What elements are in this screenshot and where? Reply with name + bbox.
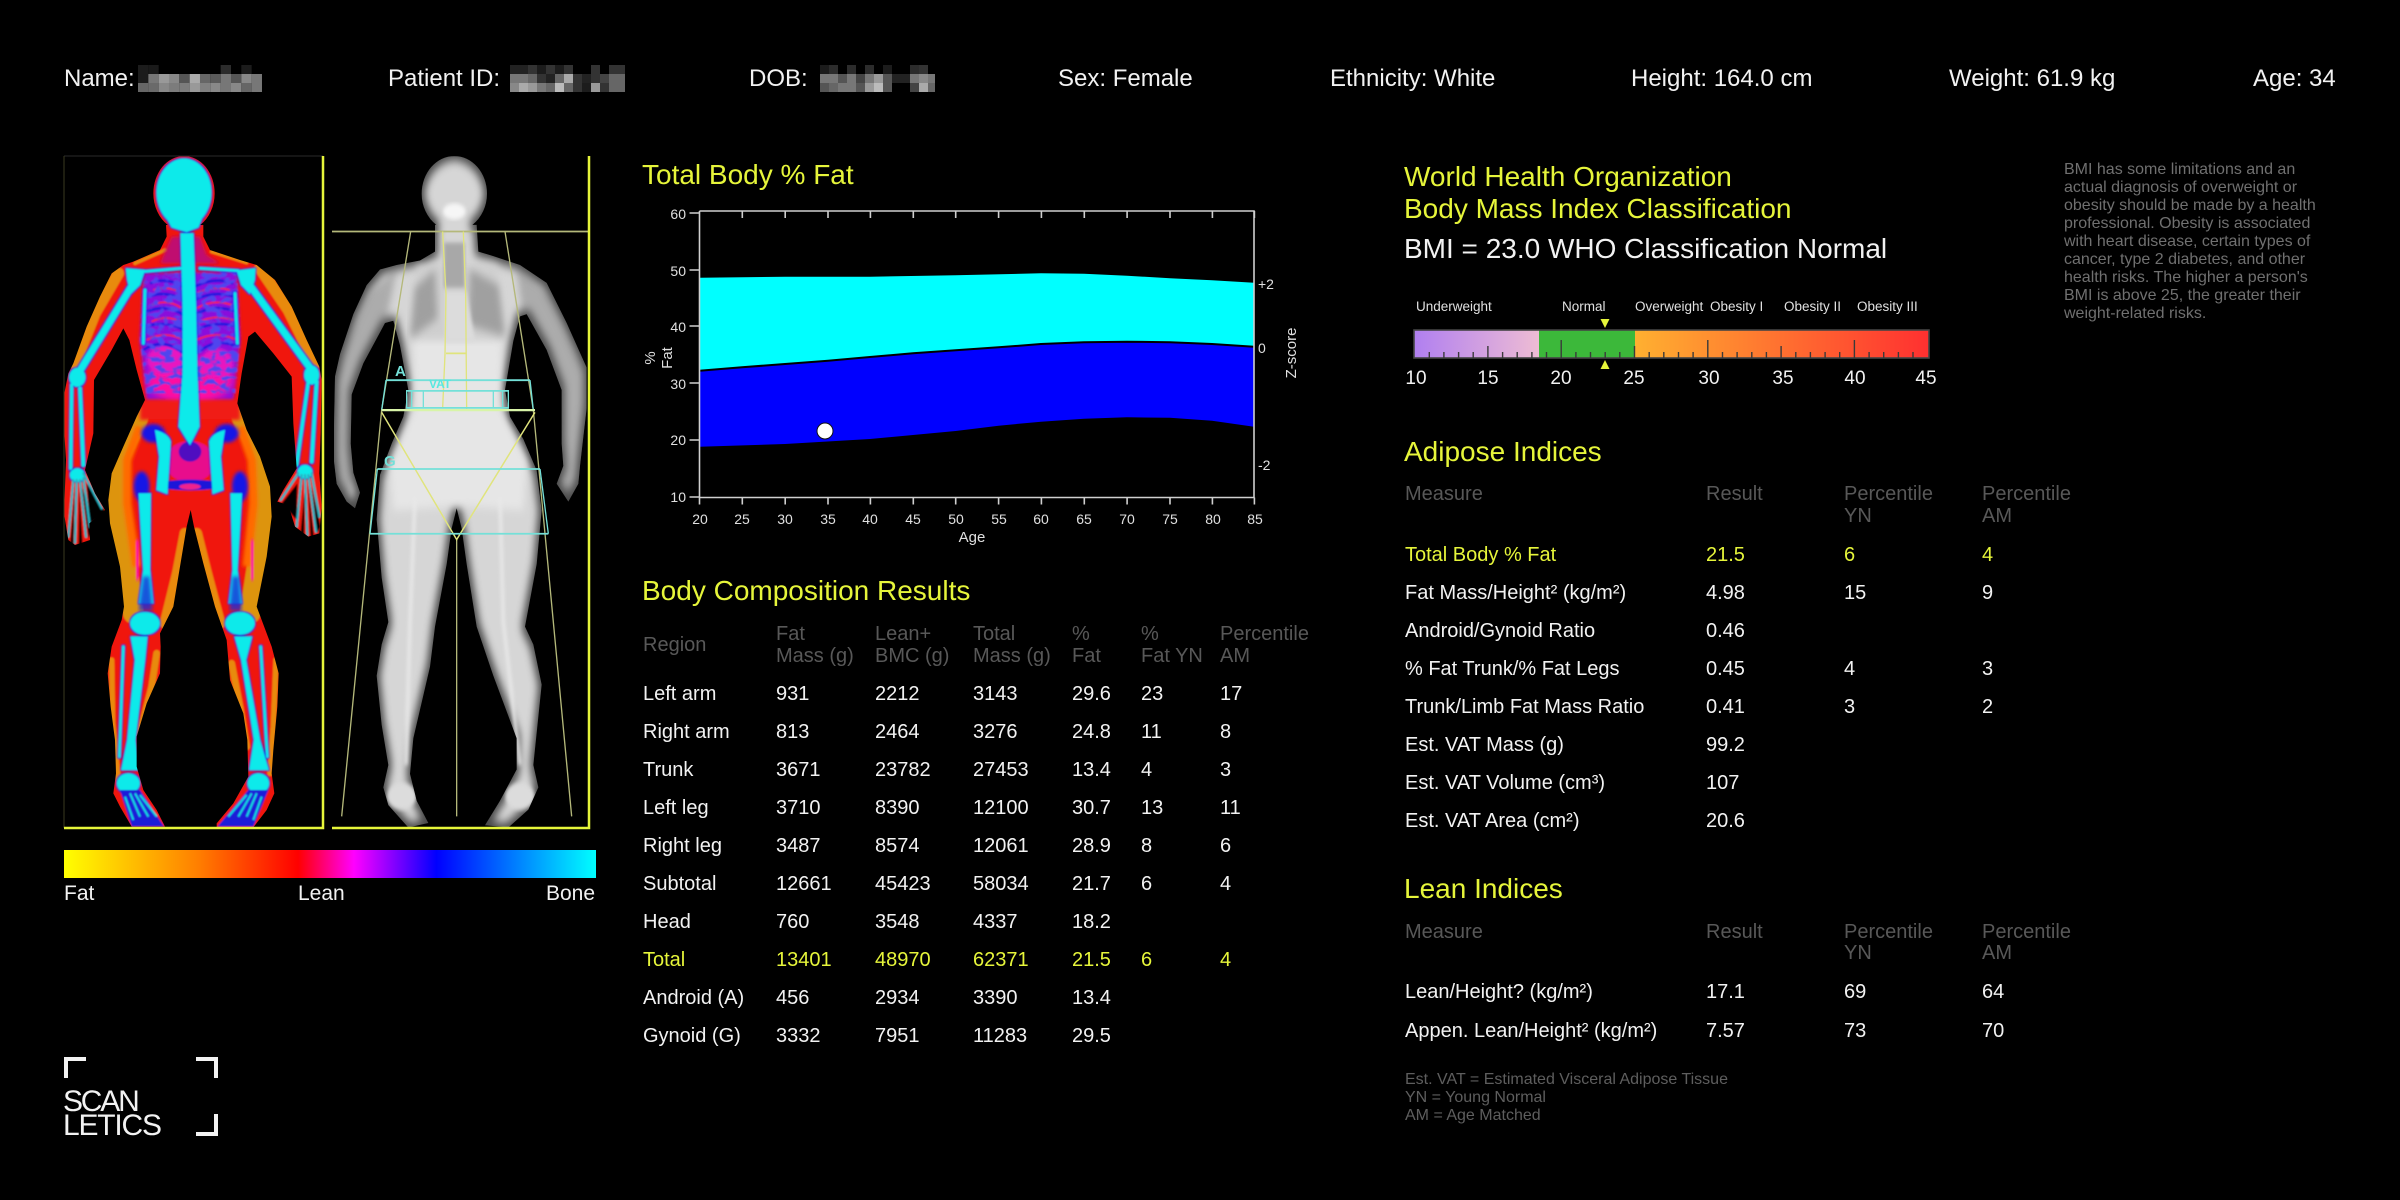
row: trunk/legs: 3 (1982, 658, 1993, 680)
y axis title (642, 346, 676, 369)
footnote: Est. VAT = Estimated Visceral Adipose Tissue (1405, 1071, 1728, 1088)
row: left leg: 8390 (875, 797, 920, 819)
row: trunk/legs: 4 (1844, 658, 1855, 680)
row: left leg: 12100 (973, 797, 1029, 819)
row: right arm: 3276 (973, 721, 1018, 743)
row: subtotal: 6 (1141, 873, 1152, 895)
category labels: Overweight (1635, 299, 1704, 314)
heading: total body % fat: Total Body % Fat (642, 159, 854, 190)
x axis labels: 55 (991, 511, 1007, 527)
scale numbers: 20 (1550, 368, 1572, 389)
row: subtotal: 12661 (776, 873, 832, 895)
table header: % (1072, 623, 1090, 645)
row: android: 456 (776, 987, 809, 1009)
row: right leg: 28.9 (1072, 835, 1111, 857)
heading: WHO body mass index classification (1404, 161, 1792, 224)
x axis labels: 30 (777, 511, 793, 527)
row: fat mass index: 9 (1982, 582, 1993, 604)
row: total: 6 (1141, 949, 1152, 971)
row: right leg: Right leg (643, 835, 722, 857)
x axis labels: 65 (1076, 511, 1092, 527)
table header: Result (1706, 483, 1763, 505)
row: right leg: 8574 (875, 835, 920, 857)
table header: Mass (g) (776, 645, 854, 667)
x axis labels: 60 (1033, 511, 1049, 527)
row: fat mass index (1405, 582, 1993, 604)
category labels: Obesity I (1710, 299, 1763, 314)
explanatory note: BMI has some limitations and an (2064, 161, 2295, 178)
patient id: Patient ID: (388, 65, 500, 92)
row: VAT volume: 107 (1706, 772, 1739, 794)
marker bottom (1600, 360, 1610, 369)
colour scale legend: Fat (64, 882, 95, 905)
row: fat mass index: Fat Mass/Height² (kg/m²) (1405, 582, 1626, 604)
row: left leg: 3710 (776, 797, 820, 819)
row: left arm: 17 (1220, 683, 1242, 705)
row: right arm: 24.8 (1072, 721, 1111, 743)
row: android: 13.4 (1072, 987, 1111, 1009)
row: right arm: 813 (776, 721, 809, 743)
row: android/gynoid: Android/Gynoid Ratio (1405, 620, 1595, 642)
row: head (643, 911, 1111, 933)
scale numbers: 25 (1623, 368, 1645, 389)
row: left arm: 23 (1141, 683, 1163, 705)
table header: Measure (1405, 483, 1483, 505)
row: left arm: 29.6 (1072, 683, 1111, 705)
row: right leg: 8 (1141, 835, 1152, 857)
logo: Scanletics: SCAN (63, 1085, 138, 1118)
row: total: 48970 (875, 949, 931, 971)
median line (700, 342, 1254, 371)
x axis labels: 50 (948, 511, 964, 527)
feet (120, 790, 164, 827)
row: total body percent fat: 6 (1844, 544, 1855, 566)
patient name (64, 65, 262, 92)
soft tissue (334, 156, 587, 828)
table header: Measure (1405, 921, 1483, 943)
row: head: 4337 (973, 911, 1018, 933)
row: subtotal: Subtotal (643, 873, 716, 895)
row: total body percent fat: 21.5 (1706, 544, 1745, 566)
heading: lean indices: Lean Indices (1404, 873, 1563, 904)
table header: Fat (776, 623, 805, 645)
row: VAT area (1405, 810, 1745, 832)
row: lean/height: Lean/Height? (kg/m²) (1405, 981, 1593, 1003)
row: trunk/limb (1405, 696, 1993, 718)
row: left leg (643, 797, 1241, 819)
x axis labels: 35 (820, 511, 836, 527)
logo: Scanletics: LETICS (63, 1109, 161, 1142)
table header (1405, 483, 2071, 527)
x axis labels: 85 (1247, 511, 1263, 527)
table header: Percentile (1220, 623, 1309, 645)
row: total: 21.5 (1072, 949, 1111, 971)
abdomen and pelvis (390, 339, 527, 511)
patient name: Name: (64, 65, 135, 92)
x axis labels: 20 (692, 511, 708, 527)
row: android: 2934 (875, 987, 920, 1009)
y axis title: % (642, 351, 659, 365)
date of birth (749, 65, 935, 92)
table header: AM (1220, 645, 1250, 667)
table header: Percentile (1982, 921, 2071, 943)
scale numbers: 35 (1772, 368, 1794, 389)
row: appendicular lean/height: 73 (1844, 1020, 1866, 1042)
heading: WHO body mass index classification: World Health Organization (1404, 161, 1732, 192)
panel: colour composition body scan (64, 156, 324, 830)
x axis labels: 75 (1162, 511, 1178, 527)
row: right arm: 8 (1220, 721, 1231, 743)
row: subtotal (643, 873, 1231, 895)
scale bar (1414, 330, 1929, 358)
row: gynoid: Gynoid (G) (643, 1025, 741, 1047)
row: left arm: Left arm (643, 683, 716, 705)
ribs (143, 281, 237, 353)
patient id (388, 65, 625, 92)
row: right arm: 2464 (875, 721, 920, 743)
colour scale legend (64, 850, 596, 905)
row: trunk: 13.4 (1072, 759, 1111, 781)
row: left arm: 931 (776, 683, 809, 705)
row: VAT mass (1405, 734, 1745, 756)
chart: total body percent fat by age (642, 206, 1300, 546)
panel frame (64, 155, 323, 157)
heading: body composition results: Body Composition Results (642, 575, 970, 606)
row: subtotal: 45423 (875, 873, 931, 895)
row: gynoid: 11283 (973, 1025, 1027, 1047)
category labels (1416, 299, 1918, 314)
row: VAT volume (1405, 772, 1739, 794)
pelvis blue flanks (141, 424, 165, 443)
row: trunk: 3671 (776, 759, 820, 781)
row: VAT area: Est. VAT Area (cm²) (1405, 810, 1579, 832)
neck shading (160, 237, 220, 263)
chart: total body percent fat by age: -2 (1258, 457, 1271, 473)
table header: AM (1982, 942, 2012, 964)
z-score labels: +2 (1258, 276, 1274, 292)
x axis labels: 25 (734, 511, 750, 527)
row: trunk: 23782 (875, 759, 931, 781)
row: android (643, 987, 1111, 1009)
region label VAT: VAT (429, 377, 452, 391)
row: right leg: 12061 (973, 835, 1029, 857)
femur distal shading (139, 577, 153, 611)
table: adipose indices (1405, 483, 2071, 832)
marker top (1600, 319, 1610, 328)
lower band (700, 342, 1254, 447)
mottled tissue (140, 272, 240, 393)
row: trunk: Trunk (643, 759, 694, 781)
explanatory note: obesity should be made by a health (2064, 197, 2316, 214)
table header (643, 623, 1309, 667)
row: lean/height: 64 (1982, 981, 2004, 1003)
row: left leg: 30.7 (1072, 797, 1111, 819)
table: lean indices (1405, 921, 2071, 1042)
scale numbers (1405, 368, 1937, 389)
scale numbers: 45 (1915, 368, 1937, 389)
row: trunk/limb: 3 (1844, 696, 1855, 718)
heading: adipose indices: Adipose Indices (1404, 436, 1602, 467)
y axis title: Fat (659, 346, 676, 369)
x axis labels: 70 (1119, 511, 1135, 527)
row: gynoid (643, 1025, 1111, 1047)
footnote (1405, 1071, 1728, 1124)
hand gaps (70, 483, 321, 547)
table header: % (1141, 623, 1159, 645)
row: total body percent fat: Total Body % Fat (1405, 544, 1557, 566)
row: left leg: Left leg (643, 797, 709, 819)
row: VAT mass: 99.2 (1706, 734, 1745, 756)
y axis labels: 10 (670, 489, 686, 505)
row: right arm: 11 (1141, 721, 1162, 743)
row: trunk: 27453 (973, 759, 1029, 781)
row: android/gynoid (1405, 620, 1745, 642)
table header (1405, 921, 2071, 964)
ethnicity: Ethnicity: White (1330, 65, 1495, 92)
row: fat mass index: 15 (1844, 582, 1866, 604)
scale numbers: 30 (1698, 368, 1720, 389)
BMI result: BMI = 23.0 WHO Classification Normal (1404, 233, 1887, 264)
row: appendicular lean/height (1405, 1020, 2004, 1042)
row: trunk/legs (1405, 658, 1993, 680)
scale numbers: 40 (1844, 368, 1866, 389)
row: android/gynoid: 0.46 (1706, 620, 1745, 642)
row: trunk: 3 (1220, 759, 1231, 781)
row: fat mass index: 4.98 (1706, 582, 1745, 604)
table header: Fat (1072, 645, 1101, 667)
row: trunk/limb: Trunk/Limb Fat Mass Ratio (1405, 696, 1644, 718)
explanatory note: weight-related risks. (2063, 305, 2206, 322)
row: android: 3390 (973, 987, 1018, 1009)
z-score axis title: Z-score (1283, 328, 1300, 378)
category labels: Underweight (1416, 299, 1492, 314)
height: Height: 164.0 cm (1631, 65, 1812, 92)
row: head: 760 (776, 911, 809, 933)
explanatory note: professional. Obesity is associated (2064, 215, 2310, 232)
arm shading (330, 269, 397, 497)
skeleton (69, 159, 319, 793)
hands (68, 473, 319, 543)
logo: Scanletics (63, 1059, 216, 1142)
chart: total body percent fat by age: 0 (1258, 340, 1266, 356)
row: gynoid: 3332 (776, 1025, 820, 1047)
footnote: YN = Young Normal (1405, 1089, 1546, 1106)
patient header (64, 65, 2336, 92)
row: appendicular lean/height: 70 (1982, 1020, 2004, 1042)
y axis labels (670, 206, 686, 505)
upper band (700, 273, 1254, 371)
sex: Sex: Female (1058, 65, 1193, 92)
row: subtotal: 4 (1220, 873, 1231, 895)
footnote: AM = Age Matched (1405, 1107, 1541, 1124)
table header: AM (1982, 505, 2012, 527)
row: total body percent fat: 4 (1982, 544, 1993, 566)
table header: Percentile (1844, 921, 1933, 943)
region label G: G (384, 453, 396, 470)
spine and mediastinum (444, 243, 465, 287)
row: total: 62371 (973, 949, 1029, 971)
table: body composition results (643, 623, 1309, 1047)
category labels: Obesity III (1857, 299, 1918, 314)
table header: YN (1844, 942, 1872, 964)
y axis labels: 60 (670, 206, 686, 222)
long bones (406, 497, 520, 765)
x axis labels: 45 (905, 511, 921, 527)
android and gynoid regions (370, 380, 548, 534)
row: trunk (643, 759, 1231, 781)
panel frame (332, 156, 589, 828)
explanatory note: actual diagnosis of overweight or (2064, 179, 2298, 196)
scale numbers: 15 (1477, 368, 1499, 389)
x axis labels (692, 511, 1263, 527)
age: Age: 34 (2253, 65, 2336, 92)
row: head: 3548 (875, 911, 920, 933)
row: trunk: 4 (1141, 759, 1152, 781)
axes and ticks (690, 211, 1254, 504)
row: total: 4 (1220, 949, 1231, 971)
row: right leg (643, 835, 1231, 857)
row: lean/height: 17.1 (1706, 981, 1745, 1003)
explanatory note: with heart disease, certain types of (2063, 233, 2311, 250)
row: left leg: 13 (1141, 797, 1163, 819)
table header: Percentile (1844, 483, 1933, 505)
row: gynoid: 29.5 (1072, 1025, 1111, 1047)
table header: Result (1706, 921, 1763, 943)
x axis labels: 80 (1205, 511, 1221, 527)
row: left arm (643, 683, 1242, 705)
row: head: 18.2 (1072, 911, 1111, 933)
scale numbers: 10 (1405, 368, 1427, 389)
row: trunk/legs: % Fat Trunk/% Fat Legs (1405, 658, 1620, 680)
row: total: 13401 (776, 949, 832, 971)
row: trunk/legs: 0.45 (1706, 658, 1745, 680)
colour scale legend: Lean (298, 882, 345, 905)
y axis labels: 50 (670, 263, 686, 279)
torso lean tissue (140, 272, 240, 400)
fat layers (75, 250, 315, 780)
colour scale legend: Bone (546, 882, 595, 905)
thigh magenta streaks (137, 540, 138, 580)
table header: Fat YN (1141, 645, 1203, 667)
region label A: A (395, 363, 406, 380)
trunk and limb lines (332, 232, 588, 816)
row: lean/height (1405, 981, 2004, 1003)
table header: Mass (g) (973, 645, 1051, 667)
explanatory note: health risks. The higher a person's (2064, 269, 2308, 286)
table header: Total (973, 623, 1015, 645)
lungs (410, 269, 437, 339)
row: left arm: 2212 (875, 683, 920, 705)
BMI scale (1405, 299, 1937, 389)
row: lean/height: 69 (1844, 981, 1866, 1003)
explanatory note (2063, 161, 2316, 322)
row: appendicular lean/height: Appen. Lean/Height² (kg/m²) (1405, 1020, 1657, 1042)
x axis labels: 40 (862, 511, 878, 527)
row: total: Total (643, 949, 685, 971)
row: total (643, 949, 1231, 971)
category labels: Obesity II (1784, 299, 1841, 314)
table header: BMC (g) (875, 645, 949, 667)
row: VAT volume: Est. VAT Volume (cm³) (1405, 772, 1605, 794)
row: head: Head (643, 911, 691, 933)
row: right leg: 6 (1220, 835, 1231, 857)
table header: Region (643, 634, 706, 656)
patient marker (817, 423, 833, 439)
y axis labels: 20 (670, 432, 686, 448)
heading: WHO body mass index classification: Body Mass Index Classification (1404, 193, 1792, 224)
row: subtotal: 21.7 (1072, 873, 1111, 895)
explanatory note: BMI is above 25, the greater their (2064, 287, 2301, 304)
explanatory note: cancer, type 2 diabetes, and other (2064, 251, 2306, 268)
table header: YN (1844, 505, 1872, 527)
panel: grayscale x-ray body with analysis regions (332, 156, 590, 830)
row: right leg: 3487 (776, 835, 820, 857)
row: trunk/limb: 0.41 (1706, 696, 1745, 718)
weight: Weight: 61.9 kg (1949, 65, 2115, 92)
row: android: Android (A) (643, 987, 744, 1009)
row: right arm (643, 721, 1231, 743)
y axis labels: 40 (670, 319, 686, 335)
x axis title: Age (959, 529, 985, 546)
table header: Percentile (1982, 483, 2071, 505)
pelvis interior (168, 440, 212, 480)
row: total body percent fat (1405, 544, 1993, 566)
row: VAT mass: Est. VAT Mass (g) (1405, 734, 1564, 756)
row: left arm: 3143 (973, 683, 1018, 705)
date of birth: DOB: (749, 65, 808, 92)
row: VAT area: 20.6 (1706, 810, 1745, 832)
row: left leg: 11 (1220, 797, 1241, 819)
row: right arm: Right arm (643, 721, 730, 743)
table header: Lean+ (875, 623, 931, 645)
category labels: Normal (1562, 299, 1606, 314)
row: gynoid: 7951 (875, 1025, 920, 1047)
row: trunk/limb: 2 (1982, 696, 1993, 718)
row: appendicular lean/height: 7.57 (1706, 1020, 1745, 1042)
row: subtotal: 58034 (973, 873, 1029, 895)
y axis labels: 30 (670, 376, 686, 392)
